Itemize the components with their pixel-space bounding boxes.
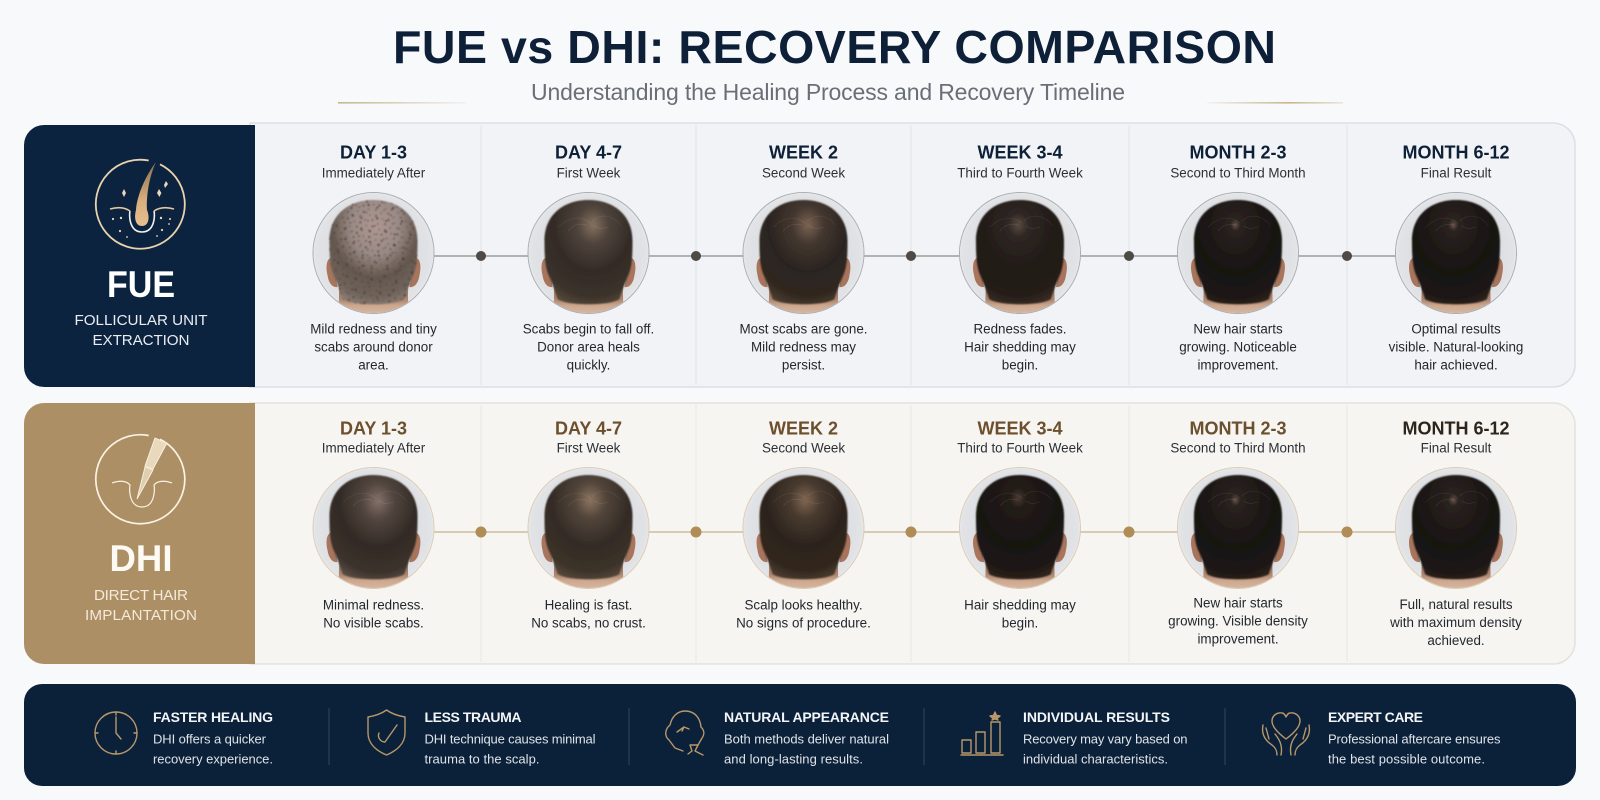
- takeaway: individual results: [961, 709, 1188, 766]
- DHI name: DHI: [110, 538, 172, 579]
- icon: rising bars with star: [961, 712, 1003, 755]
- FUE stage: day 1-3: scabs around donor: [314, 340, 433, 354]
- FUE stage: month 2-3: growing. Noticeable: [1179, 340, 1297, 354]
- icon: hair follicle: [96, 160, 185, 249]
- FUE stage: week 2: WEEK 2: [769, 142, 838, 162]
- FUE stage: day 1-3: Mild redness and tiny: [310, 322, 437, 336]
- head photo: [1178, 192, 1298, 315]
- FUE stage: month 2-3: [1170, 142, 1306, 372]
- DHI stage: week 3-4: Third to Fourth Week: [957, 440, 1083, 456]
- FUE stage: week 2: persist.: [782, 358, 825, 372]
- FUE stage: day 1-3: [310, 142, 437, 372]
- DHI stage: week 2: No signs of procedure.: [736, 616, 871, 630]
- DHI timeline background: [250, 403, 1575, 664]
- head photo: [743, 192, 864, 315]
- FUE stage: week 2: Second Week: [762, 166, 845, 180]
- DHI stage: month 6-12: achieved.: [1427, 633, 1485, 648]
- DHI stage: day 1-3: Immediately After: [322, 440, 426, 456]
- head photo: [1178, 468, 1298, 590]
- subtitle accent lines: [338, 102, 1343, 104]
- FUE stage: month 6-12: hair achieved.: [1414, 358, 1498, 372]
- DHI stage: month 2-3: [1168, 418, 1308, 646]
- DHI stage: day 4-7: [528, 418, 649, 630]
- DHI stage: week 3-4: begin.: [1002, 616, 1038, 630]
- subtitle: Understanding the Healing Process and Recovery Timeline: [531, 79, 1125, 105]
- DHI stage: week 3-4: WEEK 3-4: [977, 418, 1063, 438]
- icon: head profile: [666, 711, 704, 755]
- FUE stage: week 3-4: begin.: [1002, 358, 1038, 372]
- FUE full name: EXTRACTION: [92, 332, 190, 349]
- DHI stage: day 4-7: Healing is fast.: [545, 598, 632, 612]
- DHI stage: day 4-7: DAY 4-7: [555, 418, 622, 438]
- takeaway: expert care: the best possible outcome.: [1328, 752, 1485, 766]
- head photo: [743, 468, 864, 590]
- DHI full name: [85, 587, 197, 624]
- panel: key takeaways band: [24, 684, 1576, 786]
- head photo: [960, 468, 1080, 590]
- DHI label block: [24, 403, 255, 664]
- takeaway: natural appearance: NATURAL APPEARANCE: [724, 709, 889, 725]
- DHI stage: day 1-3: No visible scabs.: [323, 616, 424, 630]
- DHI stage: month 6-12: with maximum density: [1389, 615, 1522, 630]
- FUE stage: day 1-3: Immediately After: [322, 166, 426, 180]
- FUE stage: day 1-3: area.: [358, 358, 389, 372]
- FUE stage: month 2-3: New hair starts: [1193, 322, 1283, 336]
- head photo: [528, 468, 649, 590]
- DHI stage: week 2: [736, 418, 871, 630]
- FUE stage: week 3-4: WEEK 3-4: [977, 142, 1063, 162]
- takeaway: less trauma: DHI technique causes minimal: [424, 732, 596, 746]
- takeaway: natural appearance: [666, 709, 889, 766]
- title: FUE vs DHI: RECOVERY COMPARISON: [393, 21, 1276, 73]
- FUE stage: week 2: [739, 142, 868, 372]
- DHI stage: day 1-3: [313, 418, 434, 630]
- FUE stage: month 2-3: MONTH 2-3: [1189, 142, 1287, 162]
- head photo: [528, 192, 649, 315]
- FUE stage: month 2-3: improvement.: [1197, 358, 1279, 372]
- takeaway: individual results: Recovery may vary based on: [1023, 732, 1188, 746]
- DHI stage: week 2: Second Week: [762, 440, 845, 456]
- DHI stage: month 6-12: Final Result: [1421, 440, 1492, 456]
- head photo: scabbed scalp: [313, 192, 434, 315]
- takeaway: faster healing: recovery experience.: [153, 752, 273, 766]
- takeaway: individual results: individual characteristics.: [1023, 752, 1168, 766]
- icon: implanter pen: [96, 435, 185, 524]
- icon: hands holding heart: [1263, 713, 1309, 755]
- takeaway: faster healing: DHI offers a quicker: [153, 732, 267, 746]
- DHI stage: week 2: WEEK 2: [769, 418, 838, 438]
- DHI stage: day 4-7: No scabs, no crust.: [531, 616, 646, 630]
- takeaway: faster healing: FASTER HEALING: [153, 709, 273, 725]
- DHI stage: day 1-3: DAY 1-3: [340, 418, 407, 438]
- panel: DHI: [24, 403, 1575, 664]
- DHI stage: week 3-4: Hair shedding may: [964, 598, 1076, 612]
- DHI stage: month 6-12: [1389, 418, 1522, 648]
- FUE stage: day 4-7: [523, 142, 654, 372]
- FUE stage: day 4-7: DAY 4-7: [555, 142, 622, 162]
- DHI stage: month 2-3: growing. Visible density: [1168, 614, 1308, 628]
- FUE stage: day 4-7: Scabs begin to fall off.: [523, 322, 654, 336]
- FUE name: FUE: [107, 264, 175, 305]
- FUE stage: week 3-4: Redness fades.: [973, 322, 1067, 336]
- takeaway: less trauma: LESS TRAUMA: [424, 709, 522, 725]
- FUE stage: month 2-3: Second to Third Month: [1170, 166, 1306, 180]
- DHI stage: day 4-7: First Week: [557, 440, 621, 456]
- timeline connector: FUE: [434, 251, 1396, 261]
- FUE full name: FOLLICULAR UNIT: [74, 312, 208, 329]
- icon: shield with check: [368, 710, 405, 755]
- icon: clock: [95, 712, 137, 754]
- DHI stage: month 2-3: improvement.: [1197, 632, 1279, 646]
- panel: FUE: [24, 123, 1575, 387]
- takeaway: less trauma: trauma to the scalp.: [424, 752, 540, 766]
- DHI stage: day 1-3: Minimal redness.: [323, 598, 424, 612]
- takeaway: less trauma: [368, 709, 596, 766]
- head photo: [1396, 192, 1516, 315]
- takeaway: natural appearance: and long-lasting results.: [724, 752, 863, 766]
- FUE full name: [74, 312, 208, 349]
- FUE stage: week 2: Most scabs are gone.: [739, 322, 868, 336]
- DHI stage: week 3-4: [957, 418, 1083, 630]
- takeaway: natural appearance: Both methods deliver natural: [724, 732, 889, 746]
- FUE stage: day 4-7: quickly.: [567, 358, 610, 372]
- FUE stage: week 3-4: [957, 142, 1083, 372]
- FUE stage: month 6-12: [1389, 142, 1523, 372]
- DHI stage: month 2-3: Second to Third Month: [1170, 440, 1306, 456]
- head photo: [313, 468, 434, 590]
- head photo: [1396, 468, 1516, 590]
- FUE stage: month 6-12: Final Result: [1421, 166, 1492, 180]
- FUE stage: week 3-4: Hair shedding may: [964, 340, 1076, 354]
- FUE stage: day 4-7: First Week: [557, 166, 621, 180]
- FUE stage: week 2: Mild redness may: [751, 340, 856, 354]
- takeaway: expert care: Professional aftercare ensures: [1328, 732, 1501, 746]
- takeaway: expert care: [1263, 709, 1501, 766]
- DHI stage: month 2-3: MONTH 2-3: [1189, 418, 1287, 438]
- DHI stage: week 2: Scalp looks healthy.: [744, 598, 863, 612]
- timeline connector: DHI: [434, 526, 1396, 538]
- DHI stage: month 6-12: Full, natural results: [1399, 597, 1513, 612]
- DHI full name: IMPLANTATION: [85, 607, 197, 624]
- takeaway: individual results: INDIVIDUAL RESULTS: [1023, 709, 1170, 725]
- FUE timeline background: [250, 123, 1575, 387]
- takeaway: faster healing: [95, 709, 273, 766]
- FUE stage: week 3-4: Third to Fourth Week: [957, 166, 1083, 180]
- FUE stage: month 6-12: Optimal results: [1411, 322, 1501, 336]
- takeaway: expert care: EXPERT CARE: [1328, 709, 1423, 725]
- FUE stage: day 1-3: DAY 1-3: [340, 142, 407, 162]
- FUE label block: [24, 125, 255, 387]
- DHI stage: month 6-12: MONTH 6-12: [1402, 418, 1510, 438]
- FUE stage: month 6-12: MONTH 6-12: [1402, 142, 1510, 162]
- head photo: [960, 192, 1080, 315]
- DHI full name: DIRECT HAIR: [94, 587, 188, 604]
- FUE stage: month 6-12: visible. Natural-looking: [1389, 340, 1523, 354]
- FUE stage: day 4-7: Donor area heals: [537, 340, 640, 354]
- DHI stage: month 2-3: New hair starts: [1193, 596, 1283, 610]
